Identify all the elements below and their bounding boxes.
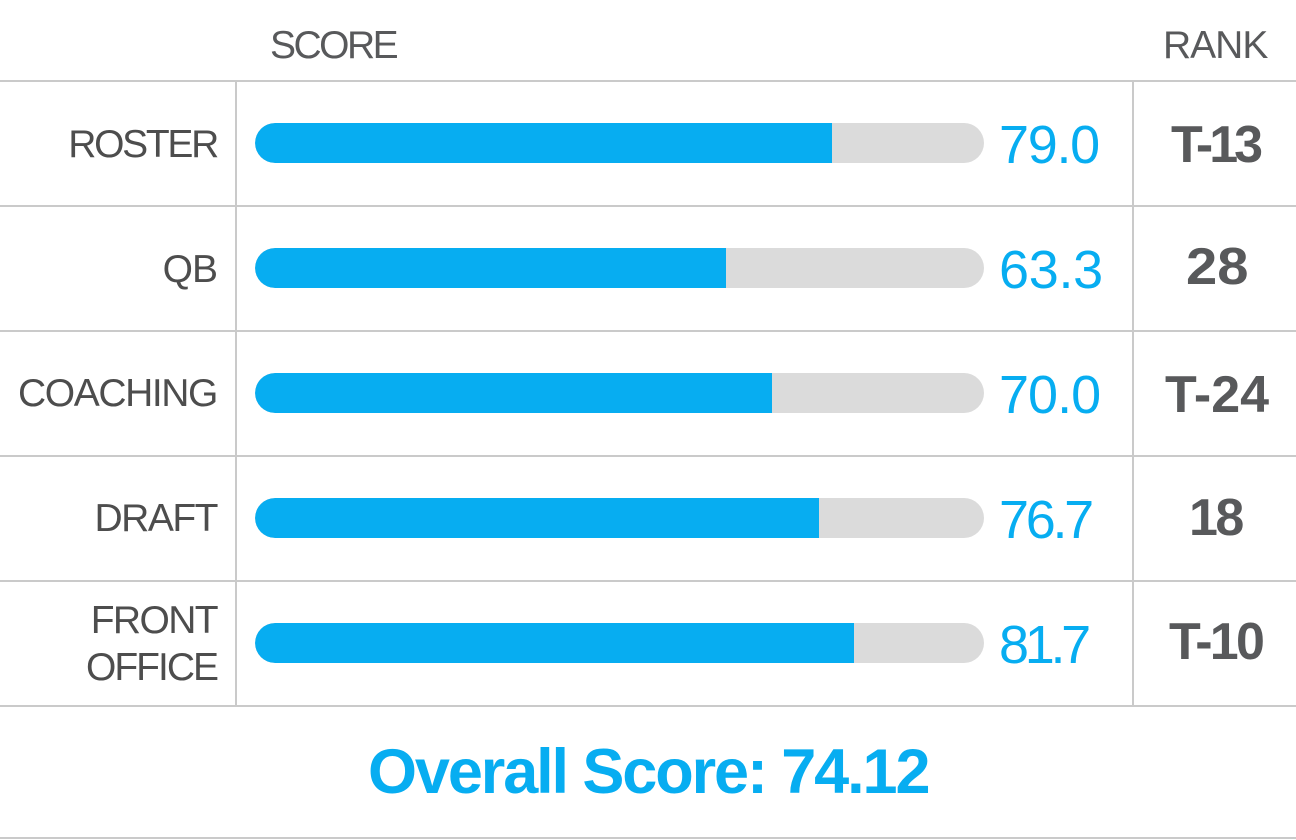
- row: front office: 81.7: [999, 615, 1087, 675]
- row: roster: [68, 115, 1262, 175]
- row: coaching: [18, 365, 1269, 425]
- row: draft: 76.7: [999, 490, 1091, 550]
- row: draft: 18: [1189, 489, 1242, 547]
- row: roster: ROSTER: [68, 123, 217, 166]
- row: front office: [86, 599, 1263, 689]
- heading: score column: SCORE: [270, 24, 396, 67]
- row: draft: DRAFT: [94, 497, 217, 540]
- row: roster: 79.0: [999, 115, 1099, 175]
- row: qb: 63.3: [999, 240, 1103, 300]
- heading: rank column: RANK: [1163, 24, 1267, 67]
- row: qb: QB: [163, 248, 217, 291]
- row: qb: 28: [1186, 238, 1248, 296]
- row: coaching: T-24: [1165, 366, 1269, 424]
- row: front office: OFFICE: [86, 646, 217, 689]
- overall score: Overall Score: 74.12: [368, 737, 928, 807]
- row: coaching: COACHING: [18, 372, 217, 415]
- row: front office: FRONT: [91, 599, 217, 642]
- row: draft: [94, 489, 1243, 550]
- row: qb: [163, 238, 1248, 300]
- row: front office: T-10: [1169, 613, 1262, 671]
- row: coaching: 70.0: [999, 365, 1100, 425]
- row: roster: T-13: [1171, 116, 1259, 174]
